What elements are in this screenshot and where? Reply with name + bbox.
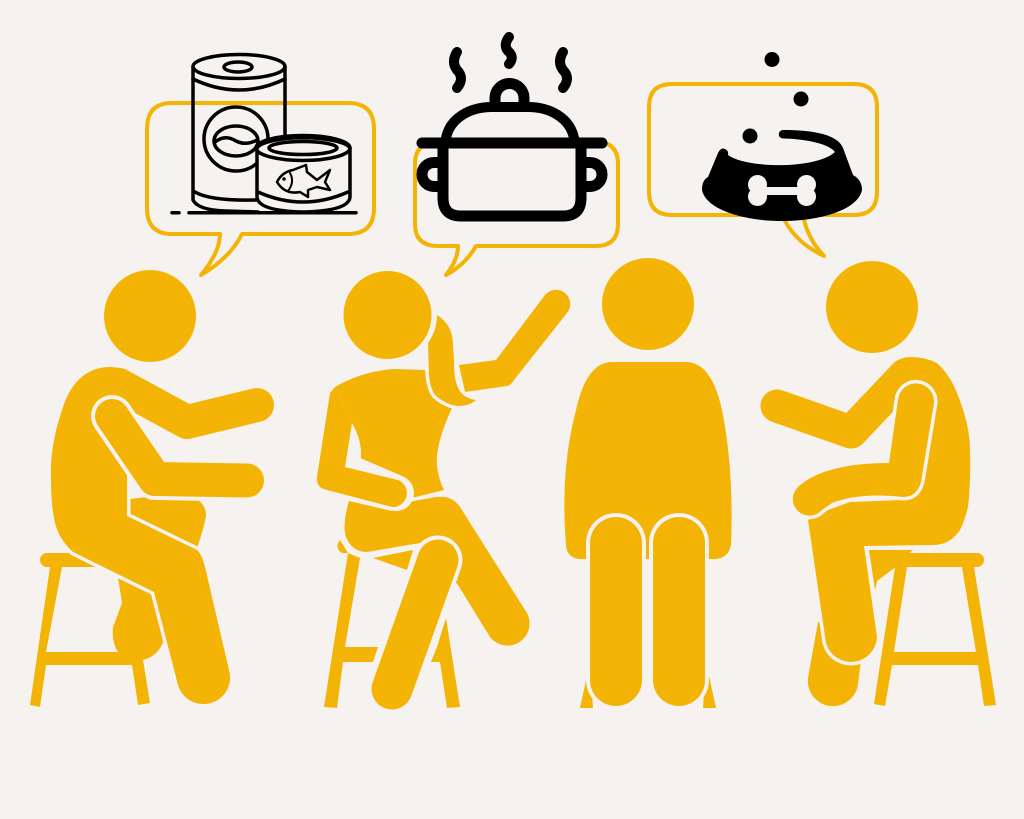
torso 3	[564, 362, 732, 559]
front arm 4	[793, 383, 934, 516]
leg right 3	[649, 543, 709, 680]
lap and back leg 2	[345, 497, 530, 646]
torso 2	[335, 369, 452, 498]
icon: steaming pot	[422, 37, 602, 216]
torso and front leg 4	[808, 357, 970, 662]
speech bubble: right	[649, 84, 877, 256]
belly 1	[130, 497, 206, 548]
raised arm 1	[119, 385, 257, 422]
stool 4	[874, 553, 996, 706]
stool 2	[324, 540, 460, 708]
stool 1	[30, 553, 150, 707]
stool 3	[580, 662, 716, 708]
ponytail	[428, 315, 476, 406]
lower back leg 1	[113, 577, 163, 661]
head 1	[104, 270, 196, 362]
back leg 4	[808, 620, 866, 706]
person 2: woman with ponytail, legs crossed	[317, 271, 570, 708]
triangle under lap	[373, 550, 413, 570]
arm 2 with forearm	[317, 387, 407, 507]
head 3	[602, 258, 694, 350]
torso and front leg 1	[51, 367, 230, 704]
person 3: seated facing away	[564, 258, 732, 708]
person 1: left, seated facing right	[30, 270, 257, 707]
crossed leg 2	[392, 560, 438, 689]
icon: dog bowl with bone	[702, 52, 862, 221]
triangle under seat	[869, 550, 913, 590]
head 2	[344, 271, 432, 359]
person 4: right, seated facing left	[777, 261, 996, 706]
extended arm 4	[777, 375, 905, 432]
raised arm 2	[459, 290, 570, 392]
front arm 1	[112, 416, 247, 480]
speech bubble: left	[147, 103, 374, 275]
speech bubble: middle	[415, 142, 618, 275]
icon: food cans	[172, 54, 356, 213]
head 4	[826, 261, 918, 353]
leg left 3	[586, 543, 646, 680]
